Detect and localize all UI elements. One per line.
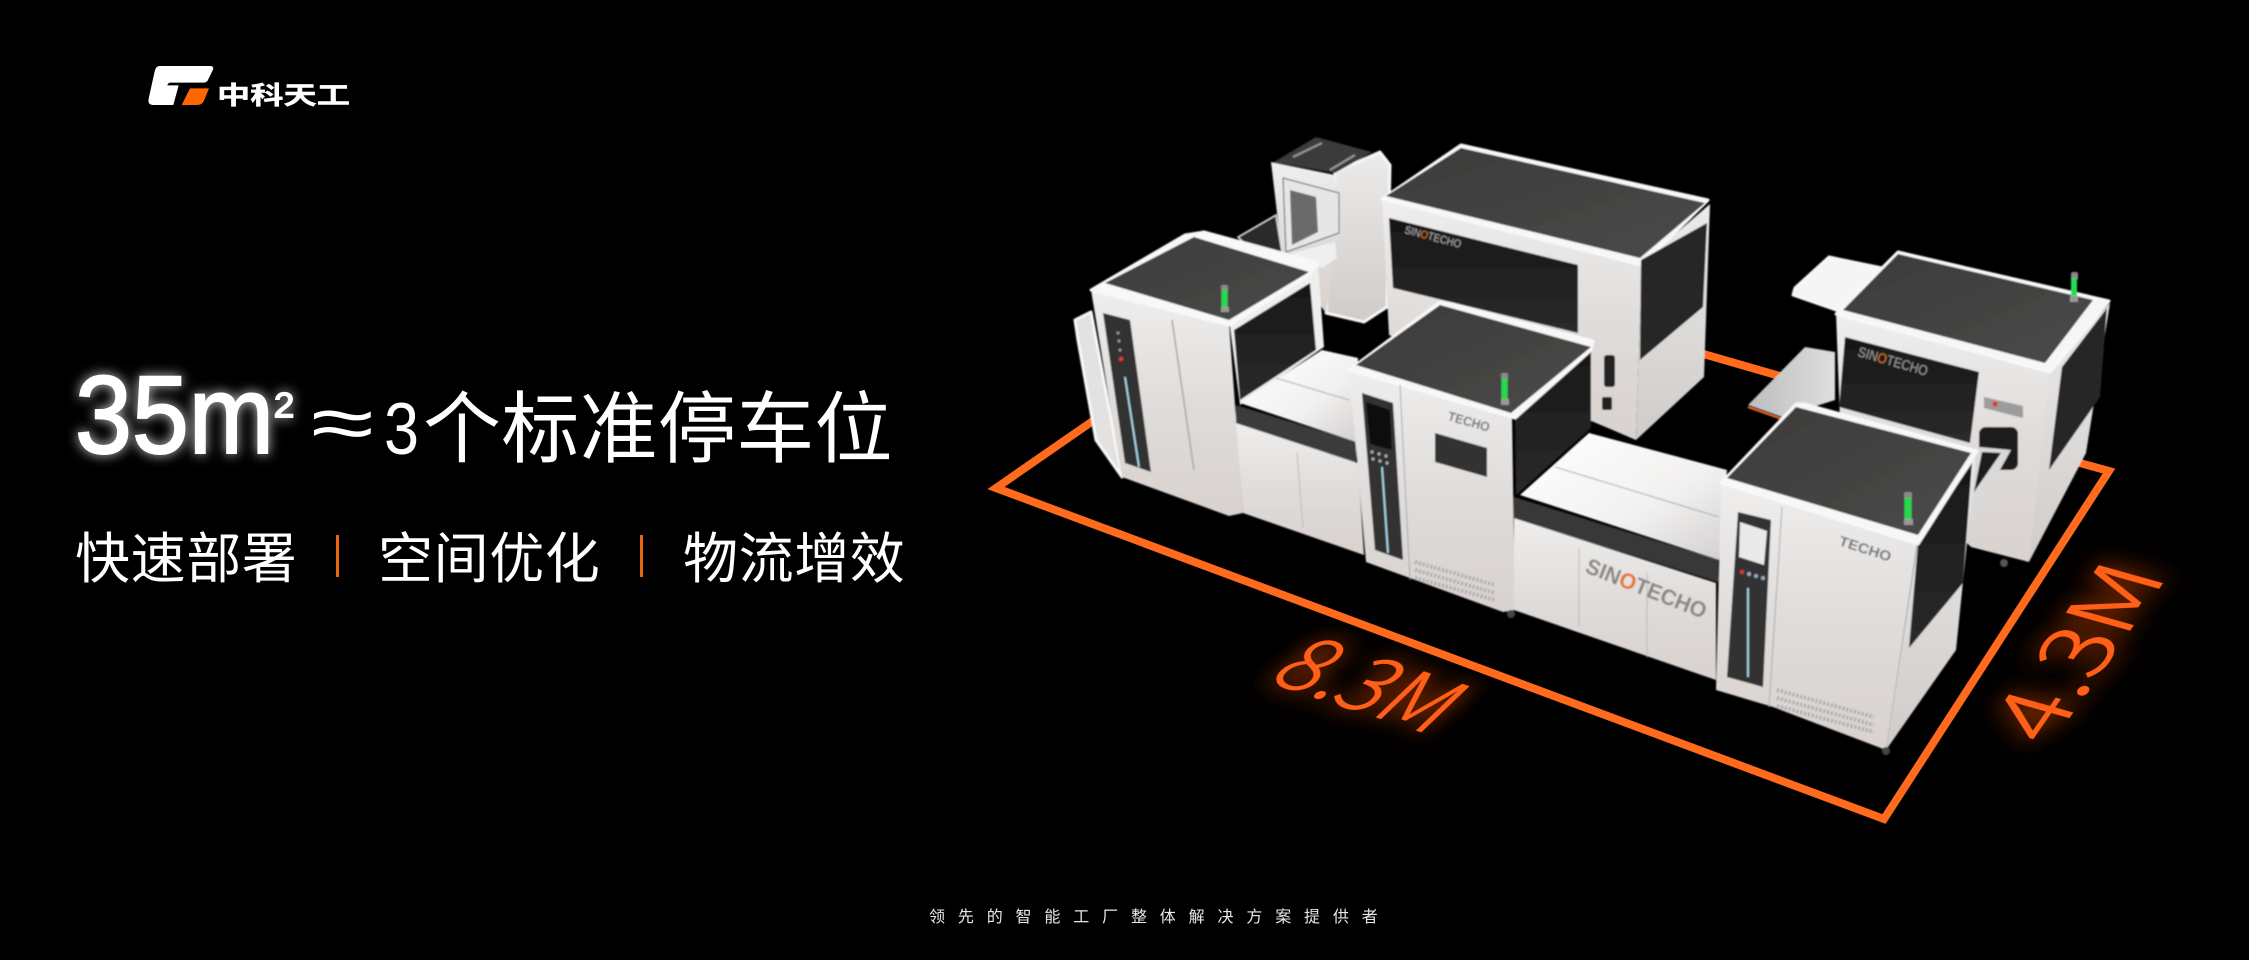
footprint frame: [996, 353, 2109, 819]
deck: [1240, 350, 1358, 442]
vents: [1777, 690, 1874, 732]
strip indicators: [1116, 332, 1122, 352]
front window: [1839, 337, 1979, 443]
foot: [1882, 747, 1890, 755]
deck: [1520, 433, 1727, 560]
headline digit: 3: [384, 389, 419, 470]
front face: [1716, 483, 1918, 750]
rail gap: [1974, 452, 2001, 492]
machine: centre unit: [1349, 302, 1593, 618]
subtitle: 快速部署: 快速部署: [75, 528, 297, 590]
dimension label 8.3M: 8.3M: [1247, 610, 1504, 753]
top panel: [1105, 237, 1309, 320]
green light: [2070, 272, 2078, 302]
rim: [1091, 232, 1318, 325]
strip buttons: [1740, 570, 1765, 580]
light line: [1125, 377, 1139, 467]
robot opening: [1283, 178, 1339, 252]
front face: [1836, 313, 2062, 562]
touch screen: [1739, 522, 1767, 565]
rim: [1721, 404, 1977, 544]
front face: [1091, 290, 1243, 516]
chute behind robot: [1238, 215, 1282, 262]
headline number 35m² with glow: ²: [274, 380, 294, 447]
side face: [1636, 204, 1710, 440]
side window: [1515, 348, 1591, 495]
red indicator: [1119, 357, 1123, 361]
conveyor section 2: [1514, 433, 1727, 680]
logo mark: [148, 66, 213, 105]
plate orange edge: [1748, 407, 1782, 419]
robot inner arm: [1290, 190, 1318, 245]
green light: [1904, 492, 1913, 525]
TECHO logo: TECHO: [1837, 533, 1893, 565]
green light: [1221, 285, 1229, 312]
cabinet: [1514, 518, 1716, 680]
control strip: [1362, 393, 1403, 560]
subtitle: 物流增效: 物流增效: [683, 528, 905, 590]
rim: [1349, 302, 1593, 418]
side window: [1909, 463, 1972, 648]
foot: [1507, 610, 1515, 618]
SINOTECHO brand: SINOTECHO: [1582, 553, 1710, 624]
subtitle: 空间优化: 空间优化: [378, 528, 600, 590]
dark band: [1514, 497, 1718, 582]
logo: 中科天工: [148, 66, 350, 110]
dimension label 4.3M: 4.3M: [1951, 547, 2194, 752]
top panel: [1386, 148, 1705, 258]
TECHO logo: TECHO: [1446, 408, 1492, 435]
machine: right back unit: [1748, 252, 2110, 567]
rim: [1382, 145, 1708, 265]
headline: [75, 354, 893, 477]
robot body side: [1326, 152, 1390, 322]
cabinet seam: [1297, 453, 1303, 528]
headline chinese: 个标准停车位: [423, 385, 893, 473]
headline number 35m² with glow: 35m: [75, 354, 274, 477]
port: [1979, 427, 2018, 470]
foot: [2000, 559, 2008, 567]
seam: [1172, 320, 1194, 470]
red button: [1992, 401, 1998, 407]
side window: [1234, 283, 1316, 400]
machine: right front unit: [1716, 404, 1977, 755]
transfer rail: [1968, 447, 2011, 522]
machine group: [1075, 137, 2110, 755]
control strip: [1727, 512, 1771, 687]
strip screen: [1366, 402, 1392, 450]
side controls: [1604, 355, 1615, 387]
logo wordmark: 中科天工: [217, 82, 350, 110]
strip buttons: [1370, 450, 1389, 465]
dark band: [1236, 405, 1356, 462]
machine: back robot unit: [1238, 137, 1390, 322]
control strip: [1103, 313, 1151, 472]
seam: [1578, 547, 1580, 627]
machine: left front unit: [1075, 232, 1324, 516]
robot shelf: [1292, 242, 1337, 268]
light line: [1382, 467, 1388, 553]
side column: [1229, 263, 1324, 405]
white tray: [1793, 257, 1882, 312]
seam: [1769, 507, 1782, 707]
rim: [1836, 252, 2109, 372]
robot vent: [1293, 143, 1355, 170]
face screen: [1435, 433, 1487, 477]
robot top: [1274, 137, 1372, 173]
top panel: [1843, 254, 2093, 363]
side face: [2029, 303, 2110, 562]
headline approx sign: ≈: [311, 378, 374, 467]
side window: [1640, 223, 1707, 360]
seam: [1646, 573, 1648, 657]
deck line: [1555, 467, 1719, 517]
control panel: [1984, 397, 2023, 418]
front window: [1389, 218, 1578, 333]
attachment: [1075, 312, 1122, 477]
deck line: [1276, 378, 1349, 400]
cabinet: [1236, 423, 1364, 555]
window logo: SINOTECHO: [1403, 224, 1463, 251]
robot body front: [1271, 162, 1338, 313]
seam: [1400, 385, 1410, 580]
subtitle row: [75, 528, 905, 590]
vents: [1415, 562, 1495, 600]
top panel: [1356, 305, 1591, 413]
light line: [1747, 588, 1749, 677]
separator: [640, 535, 643, 577]
green light: [1501, 373, 1509, 405]
side window: [2049, 308, 2107, 470]
footer tagline: 领先的智能工厂整体解决方案提供者: [929, 908, 1391, 926]
side socket: [1602, 397, 1612, 410]
machine: back large unit: [1382, 145, 1710, 440]
conveyor section 1: [1236, 350, 1364, 555]
grey plate: [1748, 347, 1835, 417]
window logo: SINOTECHO: [1856, 344, 1930, 379]
separator: [336, 535, 339, 577]
front face: [1349, 370, 1515, 612]
top panel: [1727, 407, 1971, 535]
side wall: [1886, 455, 1976, 750]
front face: [1382, 197, 1642, 440]
